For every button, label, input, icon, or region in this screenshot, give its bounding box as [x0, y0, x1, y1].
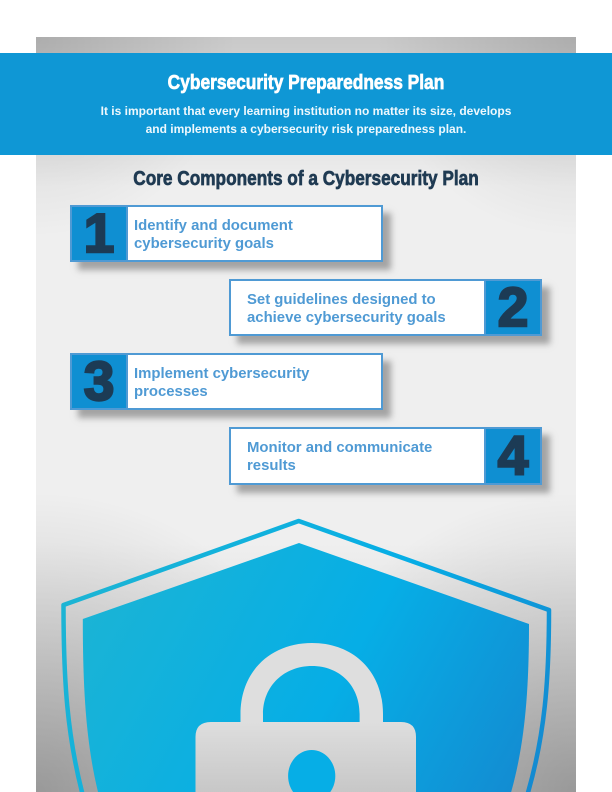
number 1: 1 [84, 202, 114, 264]
step 2 text [247, 292, 446, 326]
keyhole [288, 750, 335, 792]
number 4: 4 [498, 424, 528, 486]
step 1 text [134, 218, 293, 252]
intro text [101, 104, 511, 136]
step 1 [70, 205, 383, 262]
title: Cybersecurity Preparedness Plan [168, 72, 444, 94]
intro text: and implements a cybersecurity risk preparedness plan. [146, 122, 466, 136]
step 4 text: Monitor and communicate [247, 440, 432, 456]
number 3 [70, 353, 128, 410]
step 3 [70, 353, 383, 410]
number 2: 2 [498, 276, 528, 338]
step 4 [229, 427, 542, 485]
intro text: It is important that every learning institution no matter its size, develops [101, 104, 511, 118]
step 2 [229, 279, 542, 336]
step 3 text: Implement cybersecurity [134, 366, 309, 382]
padlock body [196, 722, 416, 792]
step 2 text: achieve cybersecurity goals [247, 310, 446, 326]
header band [0, 53, 612, 155]
shield outline [64, 521, 549, 792]
step 1 text: Identify and document [134, 218, 293, 234]
number 4 [484, 427, 542, 485]
number 2 [484, 279, 542, 336]
step 4 text [247, 440, 432, 474]
step 1 text: cybersecurity goals [134, 236, 274, 252]
step 2 text: Set guidelines designed to [247, 292, 436, 308]
step 4 text: results [247, 458, 296, 474]
number 3: 3 [84, 350, 114, 412]
number 1 [70, 205, 128, 262]
step 3 text: processes [134, 384, 208, 400]
padlock shackle [240, 643, 383, 724]
section heading: Core Components of a Cybersecurity Plan [133, 167, 479, 190]
shield body [83, 543, 529, 792]
step 3 text [134, 366, 310, 400]
